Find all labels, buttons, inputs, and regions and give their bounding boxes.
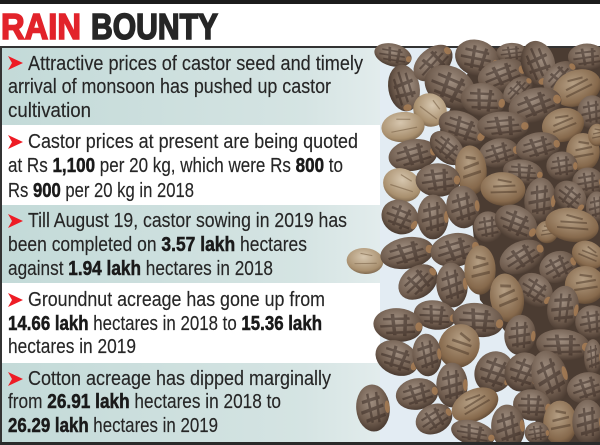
bullet 5 text xyxy=(8,368,331,437)
bullet 4 text xyxy=(8,289,325,358)
rule under title xyxy=(0,46,600,48)
bullet 3 text xyxy=(8,210,347,280)
band 5 xyxy=(0,363,380,442)
bullet 2 text: at Rs 1,100 per 20 kg, which were Rs 800 to xyxy=(8,155,343,177)
castor seeds photo xyxy=(346,33,600,445)
bullet 4 text: hectares in 2019 xyxy=(8,336,136,358)
arrow 1 xyxy=(8,56,23,70)
bullet 2 text: Castor prices at present are being quoted xyxy=(28,131,358,153)
bullet 1 text: Attractive prices of castor seed and timely xyxy=(28,53,363,75)
arrow 5 xyxy=(8,372,23,386)
bullet 3 text: Till August 19, castor sowing in 2019 has xyxy=(28,210,347,232)
photo background behind seeds xyxy=(380,48,600,442)
band 3 xyxy=(0,205,380,283)
bullet 5 text: Cotton acreage has dipped marginally xyxy=(28,368,331,390)
bullet 1 text: arrival of monsoon has pushed up castor xyxy=(8,76,331,98)
bottom black bar xyxy=(0,442,600,445)
title: RAIN BOUNTY: RAIN xyxy=(1,6,81,47)
bullet 5 text: 26.29 lakh hectares in 2019 xyxy=(8,415,218,437)
band 1 xyxy=(0,48,380,125)
arrow 2 xyxy=(8,135,23,149)
bullet 1 text xyxy=(8,53,363,122)
bullet 5 text: from 26.91 lakh hectares in 2018 to xyxy=(8,391,281,413)
bullet 4 text: 14.66 lakh hectares in 2018 to 15.36 lakh xyxy=(8,313,322,335)
bullet 1 text: cultivation xyxy=(8,100,91,122)
panel: facts list xyxy=(0,47,380,442)
bullet 3 text: against 1.94 lakh hectares in 2018 xyxy=(8,258,273,280)
top black bar xyxy=(0,0,600,4)
title: RAIN BOUNTY: BOUNTY xyxy=(91,6,218,47)
title: RAIN BOUNTY xyxy=(1,6,218,47)
bullet 4 text: Groundnut acreage has gone up from xyxy=(28,289,325,311)
bullet 3 text: been completed on 3.57 lakh hectares xyxy=(8,234,307,256)
bullet 2 text xyxy=(8,131,358,202)
bullet 2 text: Rs 900 per 20 kg in 2018 xyxy=(8,180,194,202)
arrow 3 xyxy=(8,214,23,228)
arrow 4 xyxy=(8,293,23,307)
